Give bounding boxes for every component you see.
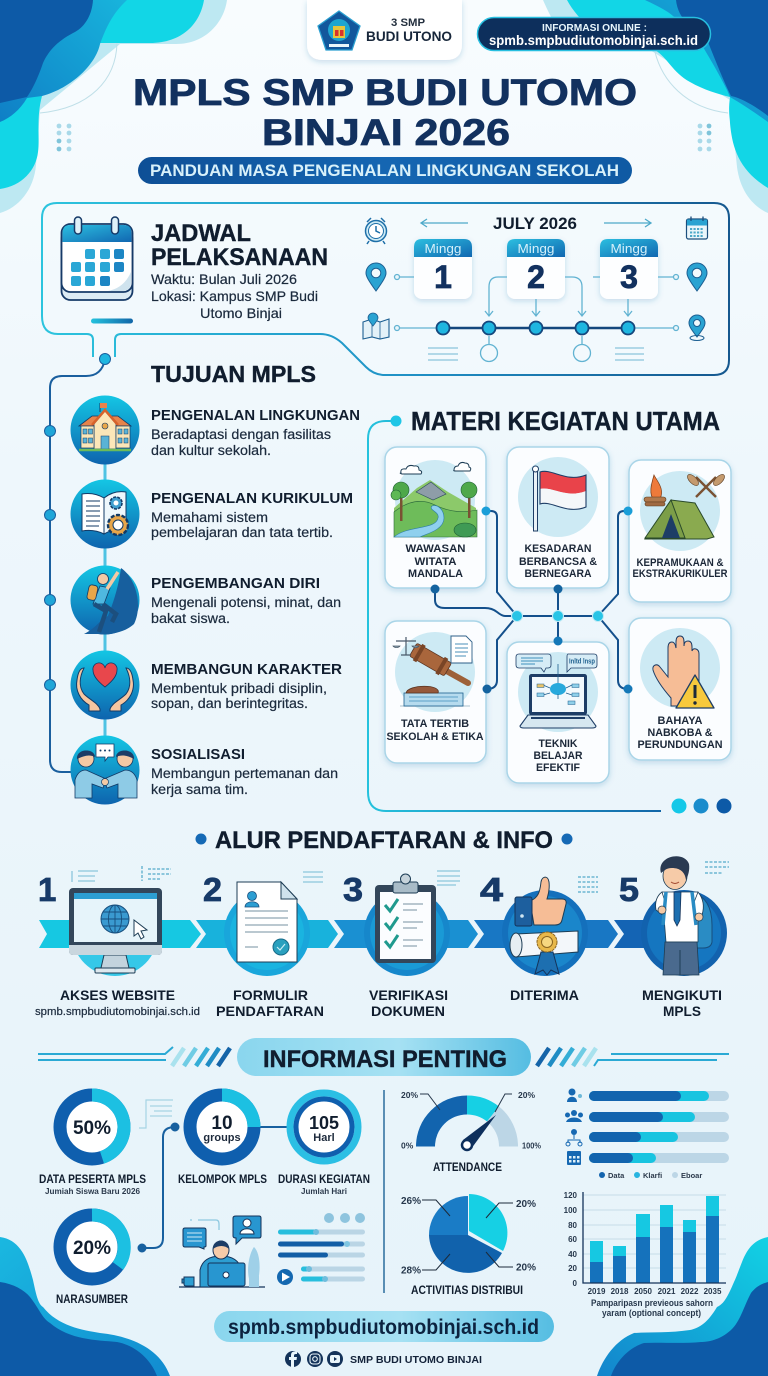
icon: map — [363, 313, 389, 339]
icon: clipboard checklist — [375, 874, 436, 963]
item: membangun karakter — [70, 650, 342, 720]
arrow band — [39, 920, 680, 948]
icon: climber — [70, 566, 140, 634]
step 1: akses website: spmb.smpbudiutomobinjai.sch.id — [35, 1006, 200, 1018]
chart: progress bars — [565, 1088, 729, 1180]
icon: calendar — [62, 217, 132, 300]
week 3 card — [600, 239, 658, 299]
card: teknik belajar: EFEKTIF — [536, 762, 580, 774]
footer url pill — [214, 1311, 554, 1342]
step 4: diterima: DITERIMA — [510, 987, 579, 1003]
icon: school crest — [318, 11, 360, 50]
donut: kelompok: groups — [203, 1132, 241, 1144]
legend: Data — [608, 1171, 625, 1180]
icon: facebook — [285, 1351, 301, 1367]
chart: attendance gauge: 20% — [401, 1090, 418, 1100]
card: kesadaran berbangsa — [507, 447, 609, 588]
panel: registration steps — [35, 856, 727, 1019]
connector: narasumber to kelompok — [138, 1124, 287, 1252]
donut: durasi kegiatan: DURASI KEGIATAN — [278, 1174, 370, 1186]
card: tata tertib — [385, 621, 486, 763]
chart: attendance gauge: 100% — [522, 1140, 541, 1150]
step 3: verifikasi: VERIFIKASI — [369, 987, 448, 1003]
icon: stop hand and warning — [653, 636, 714, 708]
item: pengembangan diri: bakat siswa. — [151, 611, 230, 626]
chart: activities pie: 28% — [401, 1266, 421, 1276]
donut: narasumber — [56, 1215, 129, 1306]
step 2: formulir: PENDAFTARAN — [216, 1003, 324, 1019]
legend — [599, 1171, 702, 1180]
item: sosialisasi: Membangun pertemanan dan — [151, 766, 338, 781]
panel dots — [672, 798, 732, 814]
chart: stacked bar chart: 2022 — [681, 1287, 699, 1296]
panel: jadwal pelaksanaan — [42, 203, 729, 375]
item: sosialisasi: SOSIALISASI — [151, 746, 245, 763]
title — [133, 71, 637, 153]
step 5: mengikuti mpls: 5 — [619, 871, 639, 908]
panel: materi kegiatan utama — [368, 406, 732, 814]
icon: instagram — [307, 1351, 323, 1367]
title: BINJAI 2026 — [262, 111, 510, 153]
icon: student with backpack — [656, 856, 712, 975]
item: pengembangan diri: PENGEMBANGAN DIRI — [151, 575, 320, 592]
icon: laptop with mind map: Inltd lnsp — [569, 658, 595, 666]
card: bahaya narkoba: PERUNDUNGAN — [638, 739, 723, 751]
card: tata tertib: TATA TERTIB — [401, 718, 469, 730]
step 1: akses website: AKSES WEBSITE — [60, 987, 175, 1003]
week 1 card — [414, 239, 472, 299]
chart: activities pie — [401, 1194, 536, 1297]
subtitle pill: PANDUAN MASA PENGENALAN LINGKUNGAN SEKOLAH — [150, 161, 619, 180]
icon: gavel, scale and document — [393, 636, 472, 706]
donut: kelompok — [178, 1095, 267, 1186]
chart: stacked bar chart: 2018 — [611, 1287, 629, 1296]
chart: stacked bar chart: yaram (optional concept) — [602, 1308, 701, 1318]
chart: stacked bar chart: 2035 — [704, 1287, 722, 1296]
chart: stacked bar chart: 2021 — [658, 1287, 676, 1296]
icon: flag — [532, 466, 586, 531]
item: membangun karakter: Membentuk pribadi disiplin, — [151, 681, 327, 696]
chart: activities pie: 26% — [401, 1196, 421, 1207]
heading: materi kegiatan utama: MATERI KEGIATAN UTAMA — [411, 406, 720, 436]
online info pill — [478, 18, 710, 50]
icons: bar row icons — [565, 1088, 583, 1165]
card: kepramukaan: KEPRAMUKAAN & — [636, 557, 724, 569]
title: MPLS SMP BUDI UTOMO — [133, 71, 637, 113]
week 3 card: 3 — [620, 259, 638, 295]
month label — [421, 214, 651, 233]
sliders — [277, 1213, 365, 1285]
icon: school — [70, 396, 140, 464]
step 5: mengikuti mpls — [619, 856, 727, 1019]
chart: stacked bar chart: 2050 — [634, 1287, 652, 1296]
item: pengenalan lingkungan — [70, 396, 360, 464]
item: pengenalan lingkungan: Beradaptasi dengan fasilitas — [151, 427, 331, 442]
header logo card — [307, 0, 462, 60]
donut: data peserta — [39, 1095, 146, 1196]
item: pengembangan diri: Mengenali potensi, minat, dan — [151, 595, 341, 610]
chart: attendance gauge: 20% — [518, 1090, 535, 1100]
icon: book and gears — [70, 480, 140, 548]
donut: durasi kegiatan: Harl — [313, 1132, 335, 1144]
week cards — [414, 239, 658, 299]
week 1 card: Mingg — [424, 241, 462, 256]
chart: stacked bar chart: 100 — [564, 1206, 578, 1215]
divider — [383, 1090, 385, 1293]
donut: kelompok: 10 — [211, 1113, 233, 1134]
card connectors — [430, 506, 632, 694]
chart: stacked bar chart: 60 — [568, 1235, 578, 1244]
item: pengenalan lingkungan: dan kultur sekolah. — [151, 443, 271, 458]
week 2 card — [507, 239, 565, 299]
activity cards — [385, 447, 731, 783]
timeline — [436, 322, 634, 334]
icon: computer monitor — [69, 888, 162, 973]
icon: tent, fire and paddles — [644, 473, 726, 539]
chart: stacked bar chart: 2019 — [588, 1287, 606, 1296]
heading: informasi penting — [38, 1038, 729, 1076]
item: membangun karakter: MEMBANGUN KARAKTER — [151, 661, 342, 678]
panel: key figures — [39, 1093, 370, 1306]
decorative step note marks — [72, 862, 729, 892]
panel: tujuan mpls list — [70, 396, 360, 804]
subtitle pill — [138, 157, 632, 184]
item: pengenalan lingkungan: PENGENALAN LINGKUNGAN — [151, 407, 360, 424]
panel outline — [368, 421, 661, 811]
step 2: formulir: 2 — [203, 871, 222, 908]
icon: diploma scroll — [510, 931, 578, 975]
text: jadwal details — [151, 220, 328, 321]
heading: alur pendaftaran: ALUR PENDAFTARAN & INFO — [215, 827, 553, 854]
legend: Eboar — [681, 1171, 702, 1180]
item: pengembangan diri — [70, 566, 341, 634]
legend: Klarfi — [643, 1171, 662, 1180]
step 3: verifikasi — [343, 871, 450, 1019]
month label: JULY 2026 — [493, 214, 577, 233]
icon: person at laptop — [179, 1216, 265, 1287]
chart: stacked bar chart: 80 — [568, 1221, 578, 1230]
item: pengenalan kurikulum: PENGENALAN KURIKULUM — [151, 490, 353, 507]
item: pengenalan kurikulum: Memahami sistem — [151, 510, 268, 525]
heading: alur pendaftaran — [39, 827, 729, 854]
chart: attendance gauge: ATTENDANCE — [433, 1162, 502, 1174]
icon: location pins — [366, 263, 707, 340]
card: bahaya narkoba: BAHAYA — [658, 715, 703, 727]
donut: data peserta: DATA PESERTA MPLS — [39, 1174, 146, 1186]
text: jadwal details: JADWAL — [151, 220, 251, 247]
week 1 card: 1 — [434, 259, 452, 295]
footer social row: SMP BUDI UTOMO BINJAI — [350, 1354, 482, 1366]
week 2 card: 2 — [527, 259, 545, 295]
chart: attendance gauge — [401, 1090, 541, 1174]
chart: stacked bar chart: 20 — [568, 1264, 578, 1273]
text: jadwal details: PELAKSANAAN — [151, 244, 328, 271]
chart: activities pie: 20% — [516, 1199, 536, 1210]
item: pengenalan kurikulum: pembelajaran dan tata tertib. — [151, 525, 333, 540]
card: teknik belajar: BELAJAR — [534, 750, 583, 762]
step 4: diterima — [480, 871, 588, 1003]
online info pill: INFORMASI ONLINE : — [542, 23, 647, 34]
icon: form document — [237, 882, 297, 962]
item: sosialisasi — [70, 736, 338, 804]
chart: stacked bar chart: 40 — [568, 1250, 578, 1259]
item: pengenalan kurikulum — [70, 480, 353, 548]
card: kepramukaan: EKSTRAKURIKULER — [632, 568, 728, 580]
card: bahaya narkoba — [629, 618, 731, 760]
decorative note lines — [139, 1100, 173, 1128]
card: bahaya narkoba: NABKOBA & — [648, 727, 713, 739]
chart: stacked bar chart — [564, 1191, 726, 1318]
step 4: diterima: 4 — [480, 871, 504, 908]
icon: thumbs up — [515, 877, 566, 926]
text: jadwal details: Lokasi: Kampus SMP Budi — [151, 288, 318, 304]
card: kepramukaan — [629, 460, 731, 602]
card: tata tertib: SEKOLAH & ETIKA — [386, 731, 484, 743]
icon: two students — [70, 736, 140, 804]
step 2: formulir: FORMULIR — [233, 987, 308, 1003]
card: teknik belajar — [507, 642, 609, 783]
donut: data peserta: Jumiah Siswa Baru 2026 — [45, 1186, 140, 1196]
item: sosialisasi: kerja sama tim. — [151, 782, 248, 797]
item: membangun karakter: sopan, dan berintegritas. — [151, 696, 308, 711]
donut: durasi kegiatan — [278, 1093, 370, 1196]
chart: attendance gauge: 0% — [401, 1140, 414, 1150]
card: wawasan wiyata mandala: WAWASAN — [406, 543, 466, 555]
step 3: verifikasi: DOKUMEN — [371, 1003, 445, 1019]
heading: tujuan mpls: TUJUAN MPLS — [151, 361, 316, 387]
week 2 card: Mingg — [518, 241, 554, 256]
step 1: akses website: 1 — [38, 871, 56, 908]
card: wawasan wiyata mandala: WITATA — [414, 556, 457, 568]
step 1: akses website — [35, 871, 200, 1018]
card: kesadaran berbangsa: KESADARAN — [524, 543, 592, 555]
heading: informasi penting: INFORMASI PENTING — [263, 1046, 507, 1073]
icon: laptop with mind map — [516, 654, 597, 728]
online info pill: spmb.smpbudiutomobinjai.sch.id — [489, 32, 698, 48]
card: wawasan wiyata mandala: MANDALA — [408, 568, 463, 580]
chart: stacked bar chart: Pamparipasn previeous sahorn — [591, 1298, 713, 1308]
step 3: verifikasi: 3 — [343, 871, 363, 908]
timeline connectors — [394, 274, 678, 362]
icon: small calendar — [686, 216, 708, 239]
step 5: mengikuti mpls: MPLS — [663, 1003, 701, 1019]
icon: hands and heart — [70, 650, 140, 720]
text: jadwal details: Waktu: Bulan Juli 2026 — [151, 271, 297, 287]
donut: durasi kegiatan: Jumlah Hari — [301, 1186, 347, 1196]
icon: landscape — [391, 462, 477, 537]
week 3 card: Mingg — [610, 241, 648, 256]
footer url pill: spmb.smpbudiutomobinjai.sch.id — [228, 1316, 539, 1339]
card: wawasan wiyata mandala — [385, 447, 486, 588]
donut: data peserta: 50% — [73, 1118, 111, 1139]
step 5: mengikuti mpls: MENGIKUTI — [642, 987, 722, 1003]
icon: alarm clock — [366, 218, 386, 244]
donut: durasi kegiatan: 105 — [309, 1113, 339, 1133]
donut: kelompok: KELOMPOK MPLS — [178, 1174, 267, 1186]
text: jadwal details: Utomo Binjai — [200, 305, 282, 321]
header logo card: 3 SMP — [391, 17, 425, 29]
footer social row — [285, 1351, 482, 1367]
card: teknik belajar: TEKNIK — [538, 738, 578, 750]
connector: jadwal to tujuan — [44, 354, 110, 772]
donut: narasumber: 20% — [73, 1238, 111, 1259]
card: kesadaran berbangsa: BERNEGARA — [524, 568, 592, 580]
icon: youtube — [327, 1351, 343, 1367]
chart: activities pie: 20% — [516, 1262, 536, 1274]
chart: stacked bar chart: 0 — [573, 1279, 578, 1288]
header logo card: BUDI UTONO — [366, 28, 452, 44]
chart: activities pie: ACTIVITIAS DISTRIBUI — [411, 1285, 523, 1297]
step 2: formulir — [203, 871, 324, 1019]
chart: stacked bar chart: 120 — [564, 1191, 578, 1200]
card: kesadaran berbangsa: BERBANCSA & — [519, 556, 597, 568]
donut: narasumber: NARASUMBER — [56, 1294, 129, 1306]
